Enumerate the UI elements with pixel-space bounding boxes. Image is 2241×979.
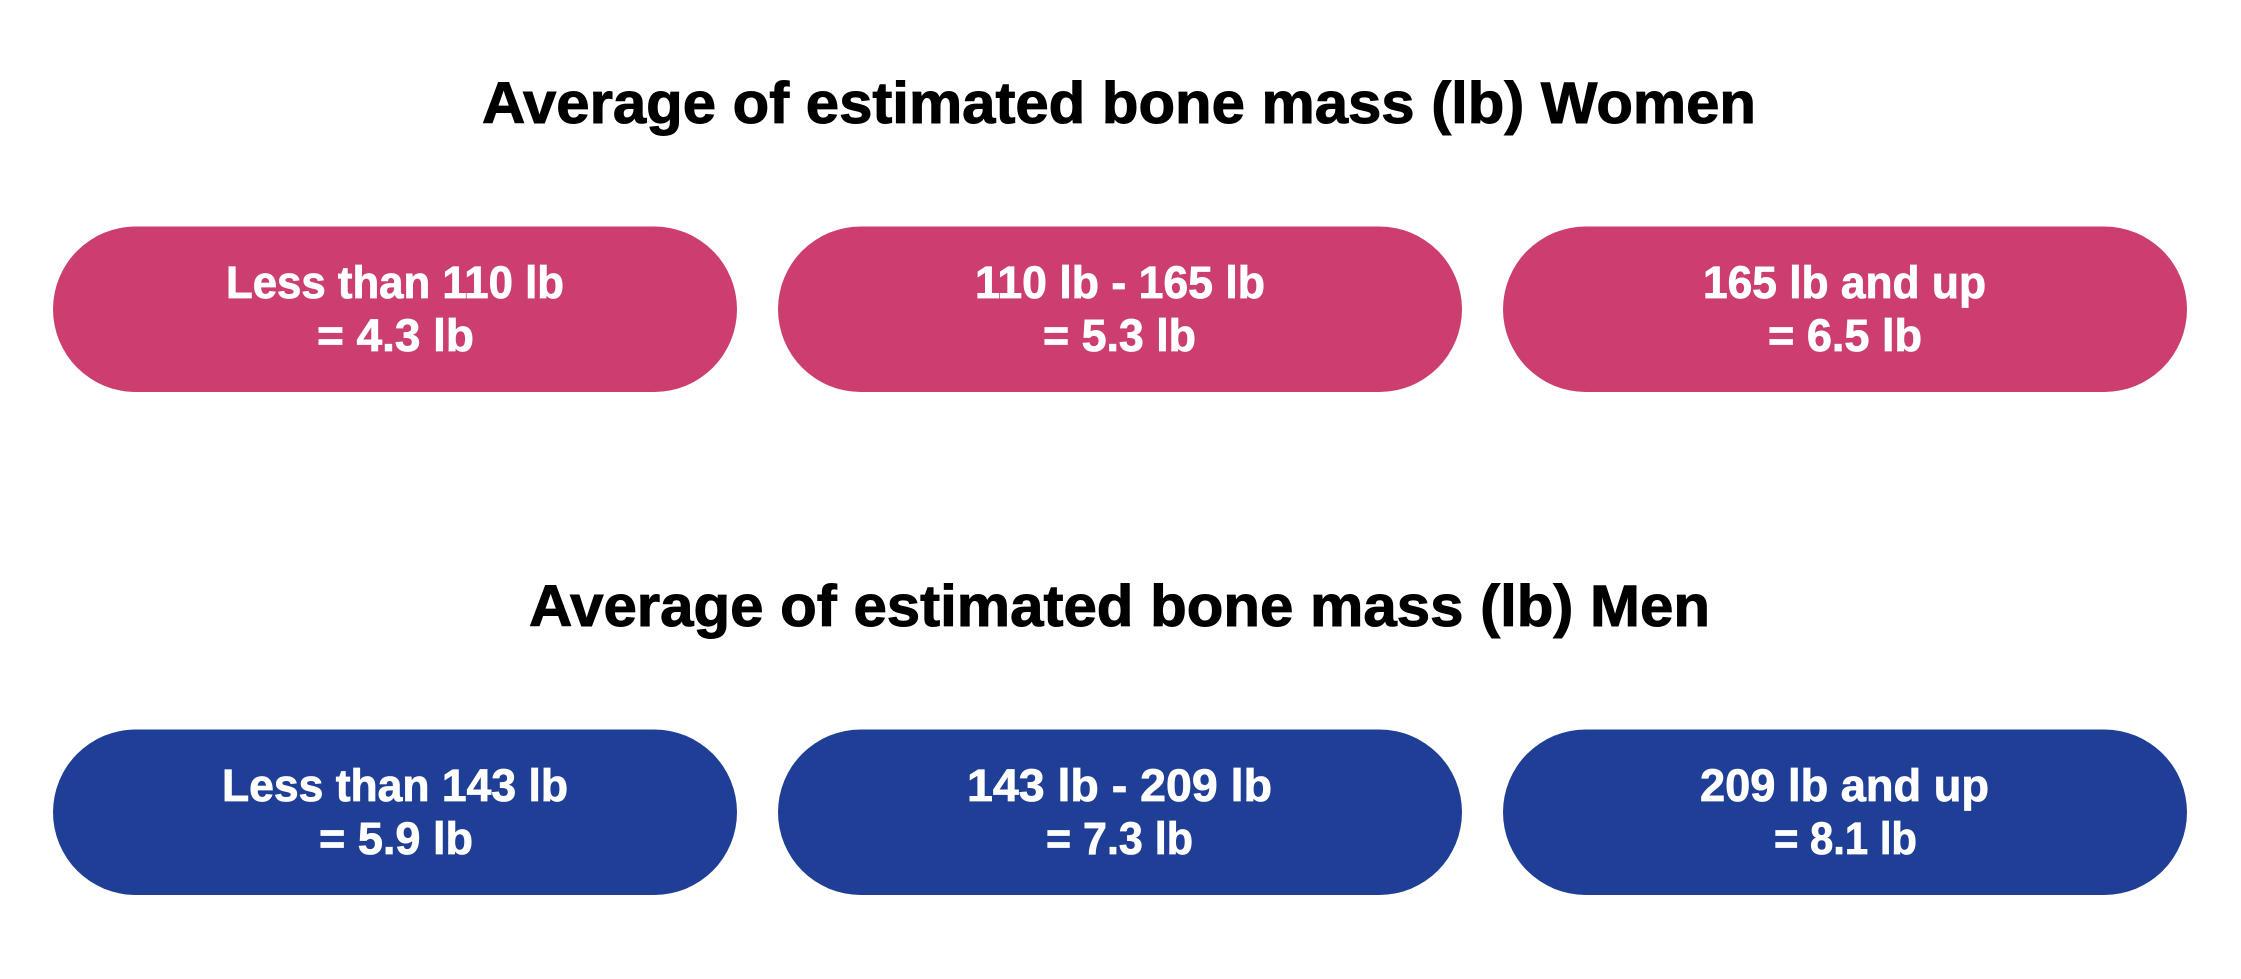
panel: men 209 lb and up xyxy=(1503,730,2187,895)
panel: women 110 lb to 165 lb: = 5.3 lb xyxy=(1043,310,1196,361)
panel: women 165 lb and up: 165 lb and up xyxy=(1703,257,1986,308)
panel: women less than 110 lb: = 4.3 lb xyxy=(317,310,474,361)
panel: women 110 lb to 165 lb xyxy=(778,226,1462,392)
panel: women less than 110 lb xyxy=(53,226,737,392)
panel: men 209 lb and up: 209 lb and up xyxy=(1700,760,1989,811)
panel: men less than 143 lb: Less than 143 lb xyxy=(222,760,568,811)
panel: men 209 lb and up: = 8.1 lb xyxy=(1774,813,1917,864)
panel: women 165 lb and up xyxy=(1503,226,2187,392)
panel: men 143 lb to 209 lb: 143 lb - 209 lb xyxy=(967,760,1272,811)
panel: men 143 lb to 209 lb xyxy=(778,730,1462,895)
heading: men: Average of estimated bone mass (lb) Men xyxy=(529,574,1710,639)
panel: men less than 143 lb: = 5.9 lb xyxy=(319,813,473,864)
heading: women: Average of estimated bone mass (lb) Women xyxy=(482,71,1756,136)
panel: women 110 lb to 165 lb: 110 lb - 165 lb xyxy=(975,257,1265,308)
panel: men 143 lb to 209 lb: = 7.3 lb xyxy=(1046,813,1193,864)
panel: women 165 lb and up: = 6.5 lb xyxy=(1768,310,1922,361)
panel: women less than 110 lb: Less than 110 lb xyxy=(226,257,564,308)
panel: men less than 143 lb xyxy=(53,730,737,895)
